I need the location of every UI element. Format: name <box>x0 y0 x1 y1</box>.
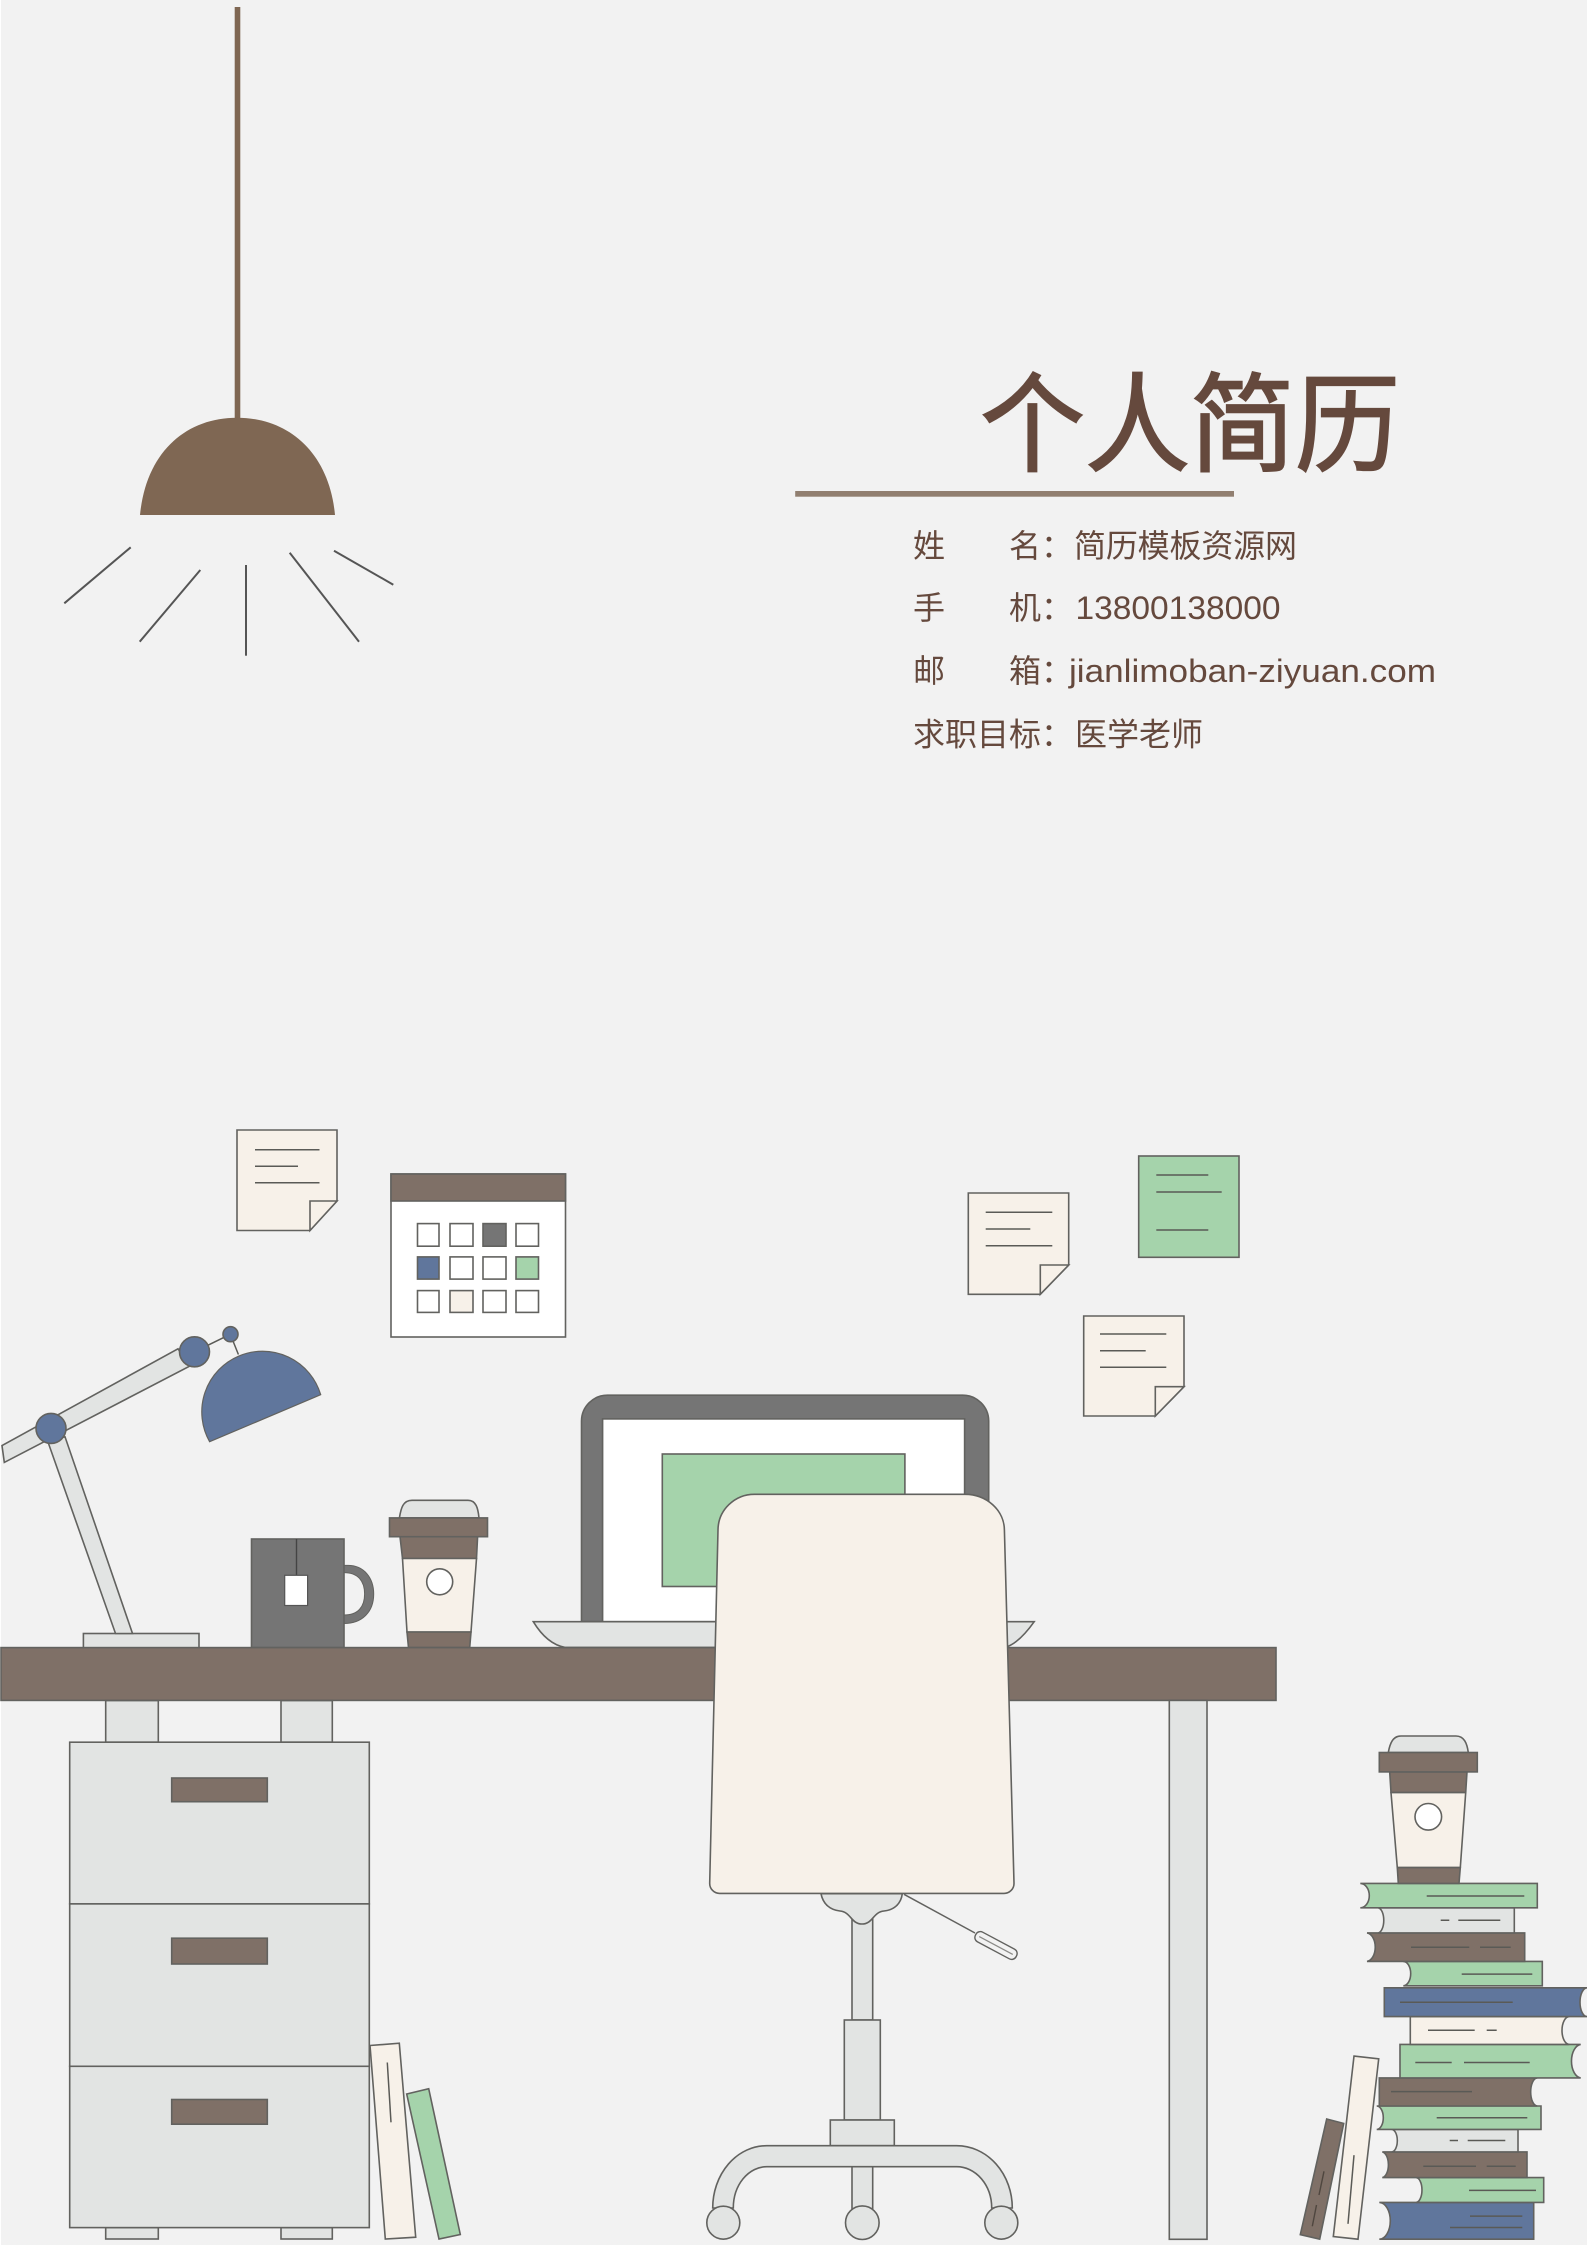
book 9 green <box>1377 2106 1541 2129</box>
row: phone <box>913 590 1280 626</box>
book 2 light <box>1378 1908 1514 1933</box>
wall calendar <box>391 1174 566 1337</box>
coffee cup on books <box>1379 1736 1477 1883</box>
book 1 green <box>1360 1883 1537 1908</box>
centre leg <box>852 2167 873 2209</box>
personal info block <box>913 528 1436 752</box>
row: name: 姓 <box>913 528 945 564</box>
book 7 green <box>1400 2044 1581 2078</box>
row: job target: 求职目标： <box>913 716 1073 752</box>
sticky note: lower right <box>1084 1316 1184 1416</box>
right desk leg <box>1169 1700 1207 2239</box>
book 11 brown <box>1382 2152 1527 2178</box>
row: email: jianlimoban-ziyuan.com <box>1068 653 1436 689</box>
laptop base <box>533 1622 1034 1647</box>
book 13 blue <box>1379 2202 1534 2239</box>
lower arm <box>48 1437 132 1634</box>
row: name: 简历模板资源网 <box>1074 528 1297 564</box>
sticky note: top left <box>237 1130 337 1230</box>
sticky note: green <box>1139 1156 1239 1257</box>
row: email: 邮 <box>913 653 945 689</box>
lever handle <box>973 1930 1019 1961</box>
top supports <box>106 1701 332 2239</box>
desk lamp <box>2 1327 321 1648</box>
desk <box>1 1648 1276 2239</box>
sticky note: middle <box>968 1193 1069 1294</box>
row: phone: 13800138000 <box>1076 590 1280 626</box>
row: name <box>913 528 1297 564</box>
lever <box>904 1894 975 1933</box>
filing cabinet <box>70 1701 369 2239</box>
chair arched base <box>713 2146 1012 2208</box>
book 5 blue <box>1384 1988 1587 2017</box>
row: name: 名： <box>1009 528 1073 564</box>
blue shade <box>202 1351 321 1442</box>
mug with tea bag <box>252 1539 374 1648</box>
coffee cup on desk <box>390 1500 488 1648</box>
seat bracket <box>821 1894 902 1924</box>
joints <box>36 1327 238 1443</box>
row: job target <box>913 716 1203 752</box>
book 3 brown <box>1367 1933 1525 1961</box>
light rays <box>64 547 393 656</box>
hanging ceiling lamp <box>64 7 393 656</box>
office chair <box>707 1494 1019 2240</box>
book 8 brown <box>1379 2078 1537 2106</box>
stack of books <box>1360 1883 1587 2239</box>
leaning books by stack <box>1300 2056 1379 2239</box>
row: phone: 手 <box>913 590 945 626</box>
wheels <box>707 2206 1018 2240</box>
book 10 light <box>1392 2129 1518 2152</box>
drawers <box>70 1742 369 1904</box>
row: email <box>913 653 1436 689</box>
title: 个人简历 <box>980 365 1400 486</box>
chair back <box>710 1494 1014 1893</box>
lamp shade <box>140 418 335 515</box>
hub <box>830 2120 894 2146</box>
lamp cord <box>235 7 240 420</box>
lamp base <box>83 1634 199 1648</box>
green window <box>662 1454 905 1586</box>
cylinder <box>844 2020 880 2120</box>
drawer handles <box>172 1778 267 2124</box>
laptop screen <box>603 1419 965 1622</box>
gas stem <box>852 1915 873 2020</box>
desk top <box>1 1648 1276 1700</box>
book 6 cream <box>1410 2017 1569 2044</box>
laptop <box>533 1395 1034 1647</box>
title underline <box>795 491 1234 497</box>
shade connector <box>194 1334 238 1354</box>
row: phone: 机： <box>1009 590 1073 626</box>
row: job target: 医学老师 <box>1075 716 1203 752</box>
upper arm <box>2 1349 190 1462</box>
book 4 green <box>1403 1961 1542 1986</box>
row: email: 箱： <box>1009 653 1073 689</box>
laptop lid <box>582 1395 989 1622</box>
leaning books beside cabinet <box>370 2043 460 2239</box>
book 12 green <box>1416 2178 1544 2202</box>
